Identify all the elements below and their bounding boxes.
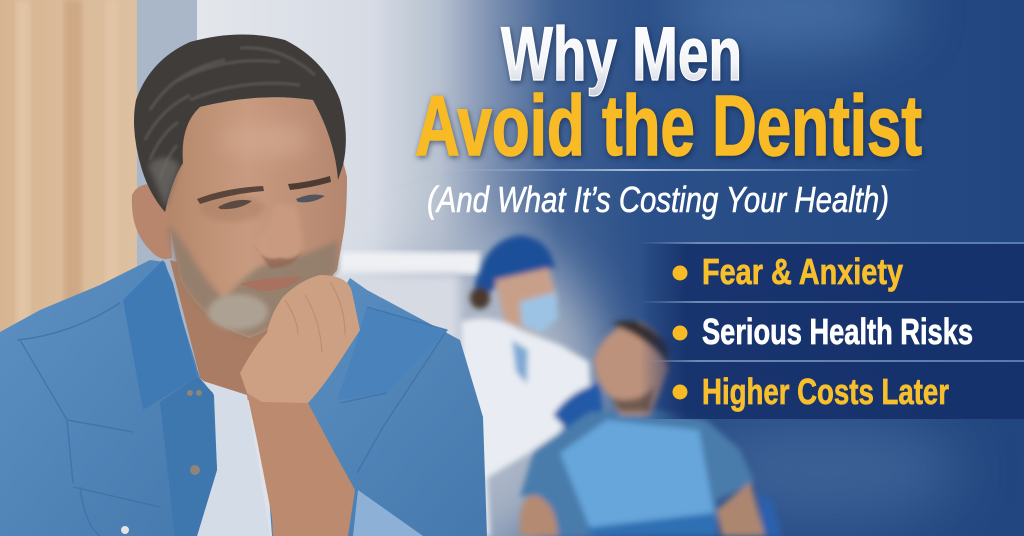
band 1 <box>640 242 1024 419</box>
nose <box>254 205 303 259</box>
mouth <box>240 277 303 291</box>
man <box>0 34 487 536</box>
blurred dentist scene <box>461 235 782 536</box>
left placket <box>160 377 217 536</box>
band 1: Fear & Anxiety <box>702 251 903 292</box>
eyes <box>218 200 252 209</box>
cuff <box>353 490 423 536</box>
patient <box>520 321 782 536</box>
band 3: Higher Costs Later <box>702 371 949 412</box>
curtain <box>0 0 137 345</box>
grey chin beard <box>208 294 268 330</box>
eye shadow <box>200 194 264 222</box>
bullet list <box>640 242 1024 419</box>
right collar <box>337 307 447 400</box>
stubble <box>167 225 338 338</box>
tee <box>197 380 270 536</box>
forearm <box>247 393 355 536</box>
subtitle: (And What It’s Costing Your Health) <box>427 179 889 220</box>
finger lines <box>285 282 345 352</box>
face <box>165 97 347 338</box>
eyebrows <box>197 186 264 204</box>
forehead highlight <box>220 122 310 158</box>
shirt stitching <box>17 303 447 536</box>
shirt right <box>262 278 487 536</box>
title <box>415 12 922 174</box>
shirt left <box>0 260 217 536</box>
ear <box>132 184 172 259</box>
heading line: Why Men: Why Men <box>501 12 742 97</box>
shirt buttons <box>121 390 202 534</box>
left collar <box>123 260 197 410</box>
hair <box>134 34 346 212</box>
fist <box>240 275 360 403</box>
title divider <box>440 169 926 171</box>
dentist <box>461 235 604 536</box>
neck <box>170 260 300 400</box>
